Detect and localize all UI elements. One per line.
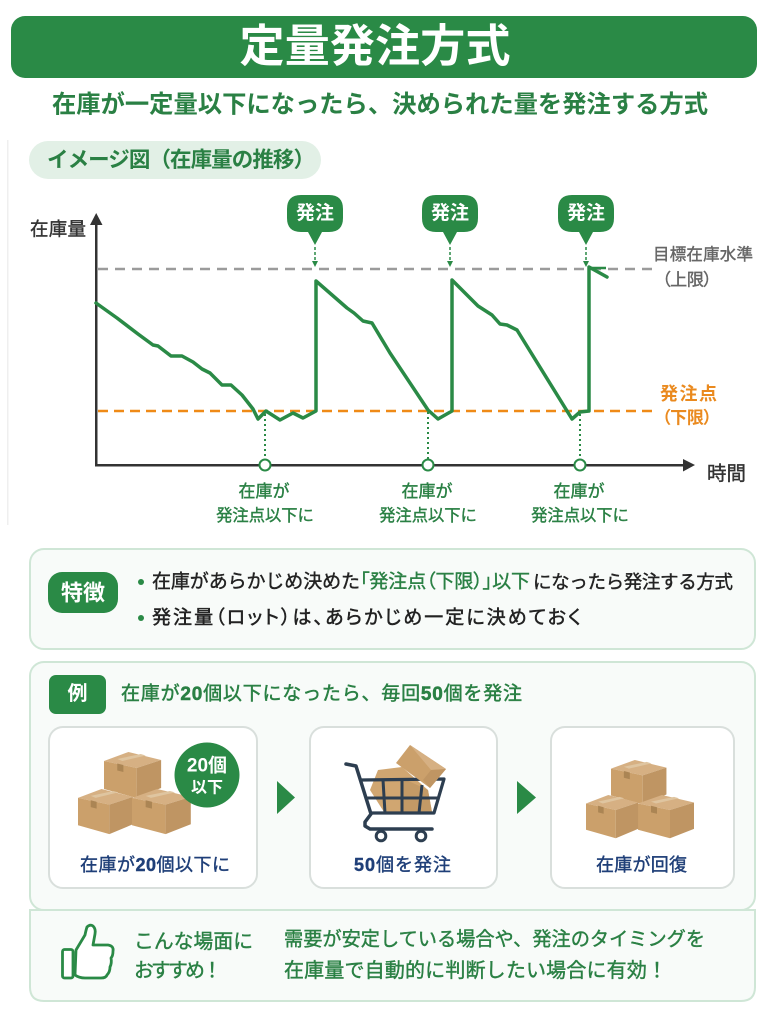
threshold label 1 [216, 482, 314, 525]
subtitle: 在庫が一定量以下になったら、決められた量を発注する方式 [52, 90, 708, 118]
example heading: 在庫が20個以下になったら、毎回50個を発注 [121, 682, 522, 704]
order callout 3 [558, 195, 614, 267]
target level label: （上限） [662, 270, 712, 290]
features badge: 特徴 [61, 580, 105, 606]
threshold label 2: 在庫が [402, 482, 452, 501]
icon: boxes [78, 752, 191, 834]
arrow [277, 781, 295, 814]
threshold label 3 [531, 482, 629, 525]
recommendation label [134, 931, 253, 982]
order callout 1 [287, 195, 343, 267]
target level label: 目標在庫水準 [653, 245, 753, 264]
badge: 20 or fewer: 20個 [187, 754, 227, 776]
order callout 3: 発注 [567, 202, 605, 224]
title: 定量発注方式 [240, 20, 510, 72]
card label: 在庫が回復 [596, 855, 687, 875]
threshold label 2 [379, 482, 477, 525]
inventory line [96, 267, 607, 420]
card: stock recovers [551, 727, 734, 888]
icon: thumbs up [62, 925, 113, 978]
example badge: 例 [68, 682, 88, 705]
card label: 在庫が20個以下に [80, 855, 230, 875]
feature 1: になったら発注する方式 [533, 572, 733, 592]
order callout 2 [422, 195, 478, 267]
arrow [517, 781, 536, 814]
badge: 20 or fewer: 以下 [191, 780, 223, 796]
target level line [98, 268, 652, 270]
feature 1: 在庫があらかじめ決めた [152, 570, 360, 592]
recommendation label: おすすめ！ [134, 960, 222, 982]
order callout 2: 発注 [431, 202, 469, 224]
recommendation label: こんな場面に [134, 931, 253, 953]
x axis label: 時間 [707, 463, 746, 485]
feature 2: 発注量（ロット）は、あらかじめ一定に決めておく [152, 606, 581, 628]
recommendation text [284, 928, 705, 982]
card: stock falls [49, 727, 257, 888]
card: place order [310, 727, 497, 888]
reorder point label: 発注点 [660, 384, 717, 404]
threshold marker 3 [574, 414, 586, 470]
title banner [11, 16, 757, 78]
chart panel [7, 140, 753, 525]
badge: 20 or fewer [174, 742, 240, 808]
threshold label 1: 在庫が [238, 482, 290, 501]
reorder point label [660, 384, 717, 428]
features badge [48, 572, 118, 613]
target level label [653, 245, 753, 290]
recommendation text: 在庫量で自動的に判断したい場合に有効！ [284, 959, 667, 982]
threshold marker 2 [422, 412, 434, 470]
reorder point line [98, 410, 652, 412]
threshold marker 1 [260, 414, 270, 470]
chart heading: イメージ図（在庫量の推移） [47, 148, 315, 172]
panel: recommended use [30, 910, 755, 1001]
panel: features [30, 549, 755, 649]
feature 1 [138, 570, 733, 592]
threshold label 3: 在庫が [554, 482, 604, 501]
x axis [95, 459, 695, 472]
icon: boxes [586, 760, 694, 838]
panel: example [30, 662, 755, 910]
y axis [90, 213, 102, 466]
threshold label 1: 発注点以下に [216, 507, 314, 525]
recommendation text: 需要が安定している場合や、発注のタイミングを [284, 928, 705, 950]
order callout 1: 発注 [296, 202, 334, 224]
y axis label: 在庫量 [30, 218, 86, 240]
card label: 50個を発注 [354, 855, 451, 875]
icon: shopping cart with boxes [346, 745, 446, 841]
chart heading [29, 141, 321, 179]
example badge [49, 675, 106, 714]
threshold label 3: 発注点以下に [531, 507, 629, 525]
reorder point label: （下限） [662, 408, 712, 428]
threshold label 2: 発注点以下に [379, 507, 477, 525]
feature 1: 「発注点（下限）」以下 [360, 570, 530, 592]
